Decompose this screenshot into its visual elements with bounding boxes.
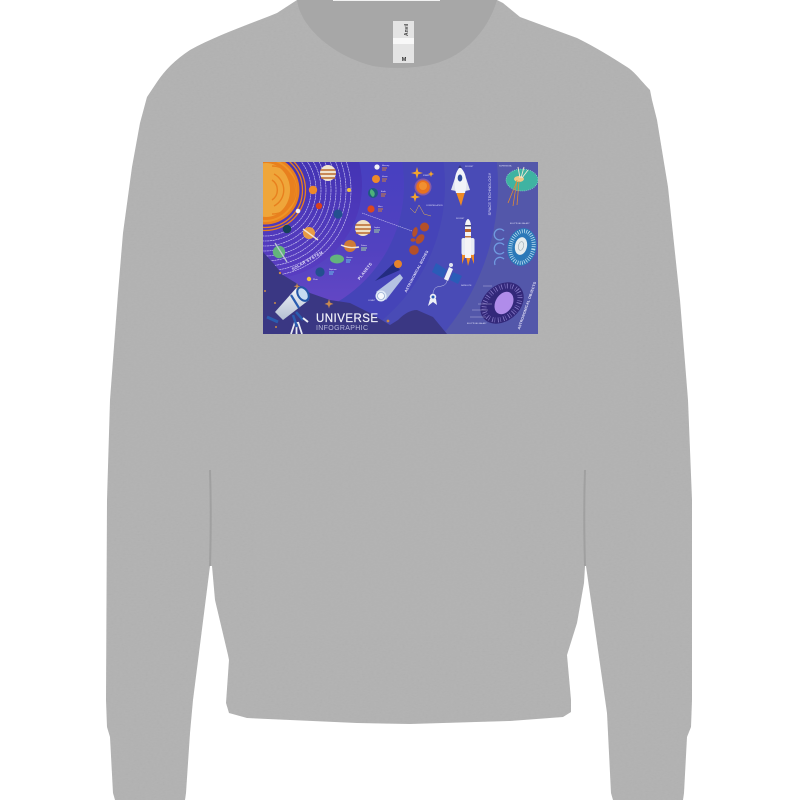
panel: universe infographic print	[263, 162, 538, 334]
icon: meteor	[375, 260, 402, 281]
planet labels: Jupiter	[374, 226, 380, 229]
planet labels: Pluto	[313, 278, 318, 281]
gauge icons	[494, 229, 504, 265]
heading: universe infographic: UNIVERSE	[316, 313, 378, 325]
neck label tag: M	[402, 57, 407, 63]
heading: space technology: SPACE TECHNOLOGY	[487, 172, 492, 215]
heading: solar system: SOLAR SYSTEM	[291, 250, 324, 272]
neck label tag	[393, 21, 414, 63]
heading: astronomical objects: ASTRONOMICAL OBJECTS	[517, 281, 537, 330]
collar and inner neck	[297, 0, 497, 68]
neck label tag: Anvil	[404, 23, 410, 36]
orbit lines	[263, 162, 352, 274]
planet labels: Mercury	[382, 165, 389, 167]
icon: telescope	[267, 284, 313, 334]
planet labels: Venus	[382, 176, 388, 178]
icon: rocket one	[451, 165, 474, 206]
garment body and sleeves	[106, 0, 692, 800]
planet labels: Mars	[378, 206, 382, 208]
icon: star sphere	[414, 174, 432, 196]
icon: satellite: SATELLITE	[461, 284, 472, 287]
icon: galaxy object	[467, 282, 524, 324]
heading: planets: PLANETS	[356, 261, 373, 281]
planet labels: Neptune	[329, 268, 337, 271]
icon: rocket two: ROCKET	[456, 218, 465, 220]
band: solar system	[263, 162, 362, 230]
icon: sun	[263, 162, 306, 232]
icon: satellite	[432, 263, 472, 287]
heading: universe infographic: INFOGRAPHIC	[316, 325, 368, 332]
planet labels: Uranus	[346, 257, 352, 259]
icon: galaxy object: ELLIPTICAL GALAXY	[467, 322, 487, 325]
solar system planets	[273, 165, 351, 262]
heading: astronomical bodies: ASTRONOMICAL BODIES	[404, 249, 430, 293]
icon: spiral galaxy: ELLIPTICAL GALAXY	[510, 222, 530, 225]
constellation	[410, 204, 443, 216]
planet labels	[313, 165, 412, 281]
icon: astronaut	[428, 281, 447, 306]
icon: rocket one: ROCKET	[465, 166, 474, 168]
asteroids	[409, 222, 429, 255]
decorative stars	[264, 272, 389, 328]
band: astronomical bodies	[91, 8, 445, 362]
icon: supernova	[499, 164, 538, 206]
icon: supernova: SUPERNOVA	[499, 164, 512, 168]
icon: spiral galaxy	[507, 222, 537, 266]
planets column	[307, 164, 380, 281]
band: planets	[286, 210, 401, 302]
icon: comet	[368, 274, 403, 302]
band: space technology	[382, 162, 498, 332]
stars icons	[410, 167, 434, 202]
planet labels: Saturn	[361, 244, 367, 247]
sweatshirt product illustration	[106, 0, 692, 800]
dark hills	[263, 252, 447, 334]
icon: rocket two	[456, 218, 474, 266]
planet labels: Earth	[381, 190, 386, 193]
constellation: CONSTELLATION	[426, 204, 443, 207]
icon: star sphere: STARS	[423, 174, 430, 177]
icon: comet: COMET	[368, 300, 376, 302]
